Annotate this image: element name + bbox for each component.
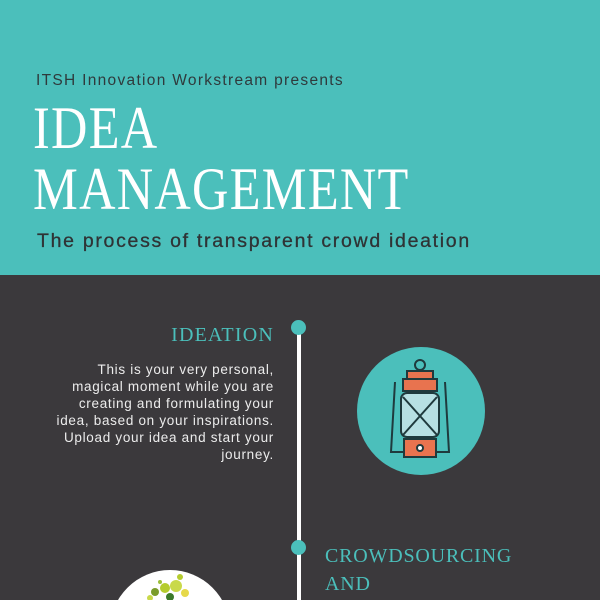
- ideation text: Upload your idea and start your: [64, 430, 274, 445]
- ideation text: [57, 362, 274, 462]
- title: [33, 95, 410, 222]
- icon: lantern: [357, 347, 485, 475]
- timeline dot 1: [291, 320, 306, 335]
- crowdsourcing heading: AND: [325, 573, 371, 595]
- timeline dot 2: [291, 540, 306, 555]
- ideation text: creating and formulating your: [79, 396, 274, 411]
- crowdsourcing heading: [325, 545, 512, 595]
- ideation heading: IDEATION: [171, 324, 274, 346]
- crowdsourcing heading: CROWDSOURCING: [325, 545, 512, 567]
- header panel: [0, 0, 600, 275]
- title: IDEA: [33, 95, 158, 161]
- icon: crowd circle: [118, 570, 222, 600]
- ideation text: magical moment while you are: [72, 379, 274, 394]
- title: MANAGEMENT: [33, 156, 410, 222]
- ideation text: This is your very personal,: [98, 362, 274, 377]
- presenter line: ITSH Innovation Workstream presents: [36, 72, 344, 89]
- ideation text: journey.: [221, 447, 274, 462]
- ideation text: idea, based on your inspirations.: [57, 413, 274, 428]
- timeline: [297, 327, 301, 600]
- subtitle: The process of transparent crowd ideation: [37, 230, 471, 252]
